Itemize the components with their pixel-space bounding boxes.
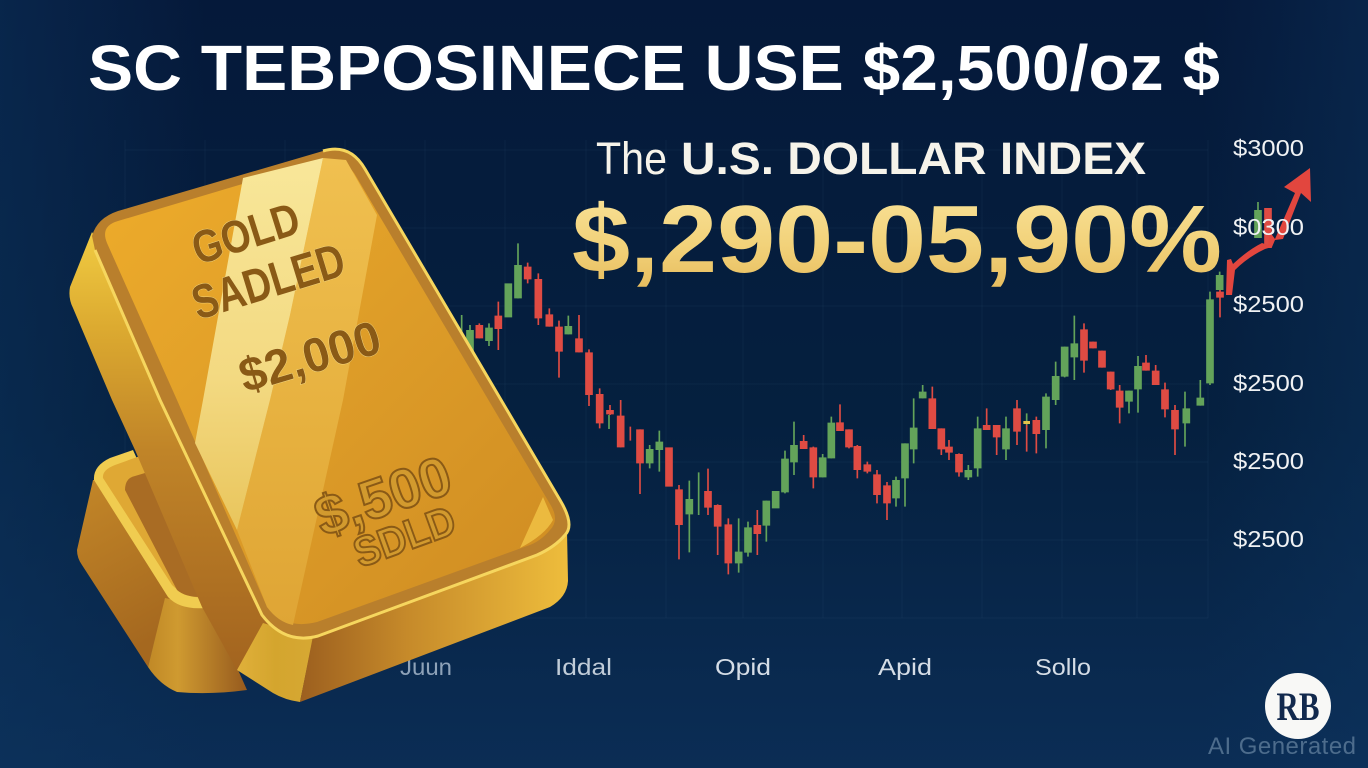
logo badge: [1265, 673, 1331, 739]
candlestick chart: [462, 202, 1268, 574]
y axis labels: $0300: [1233, 214, 1304, 240]
y axis labels: $2500: [1233, 291, 1304, 317]
subtitle: The: [596, 133, 667, 184]
upper bar: top face: [105, 160, 555, 624]
watermark: AI Generated: [1208, 733, 1356, 760]
lower gold bar: [77, 450, 247, 693]
gold bars illustration: [69, 149, 569, 702]
x axis labels: Sollo: [1035, 654, 1091, 680]
upper bar: left side: [69, 232, 280, 670]
arrow: red upward trend: [1226, 168, 1311, 295]
engraved text: gold sadled: GOLD: [185, 192, 306, 275]
upper bar: bright highlight band: [195, 158, 323, 530]
y axis labels: $2500: [1233, 526, 1304, 552]
engraved text: $,500 sold: $,500: [306, 443, 459, 548]
y axis labels: [1233, 135, 1304, 552]
chart grid: [125, 140, 1208, 618]
x axis labels: Iddal: [555, 654, 612, 680]
logo badge: RB: [1276, 684, 1320, 729]
upper bar: bottom side: [300, 531, 568, 702]
x axis labels: Opid: [715, 654, 771, 680]
upper bar: rim: [92, 149, 569, 638]
upper bar: front side: [237, 623, 313, 702]
x axis labels: [400, 654, 1091, 680]
engraved text: gold sadled: [185, 192, 387, 404]
upper bar: corner glint: [520, 497, 553, 548]
upper bar: rim highlights: [95, 149, 569, 638]
engraved text: gold sadled: $2,000: [233, 312, 387, 404]
engraved text: $,500 sold: SDLD: [347, 496, 462, 576]
y axis labels: $3000: [1233, 135, 1304, 161]
upper bar: soft highlight band: [237, 158, 377, 625]
engraved text: gold sadled: SADLED: [186, 234, 351, 331]
candles: right section and breakout: [867, 202, 1268, 520]
y axis labels: $2500: [1233, 448, 1304, 474]
title: SC TEBPOSINECE USE $2,500/oz $: [88, 32, 1220, 104]
y axis labels: $2500: [1233, 370, 1304, 396]
big headline figure: $,290-05,90%: [572, 186, 1222, 293]
x axis labels: Apid: [878, 654, 932, 680]
subtitle: U.S. DOLLAR INDEX: [681, 133, 1146, 184]
candles: left and middle section: [462, 243, 857, 574]
x axis labels: Juun: [400, 654, 452, 680]
